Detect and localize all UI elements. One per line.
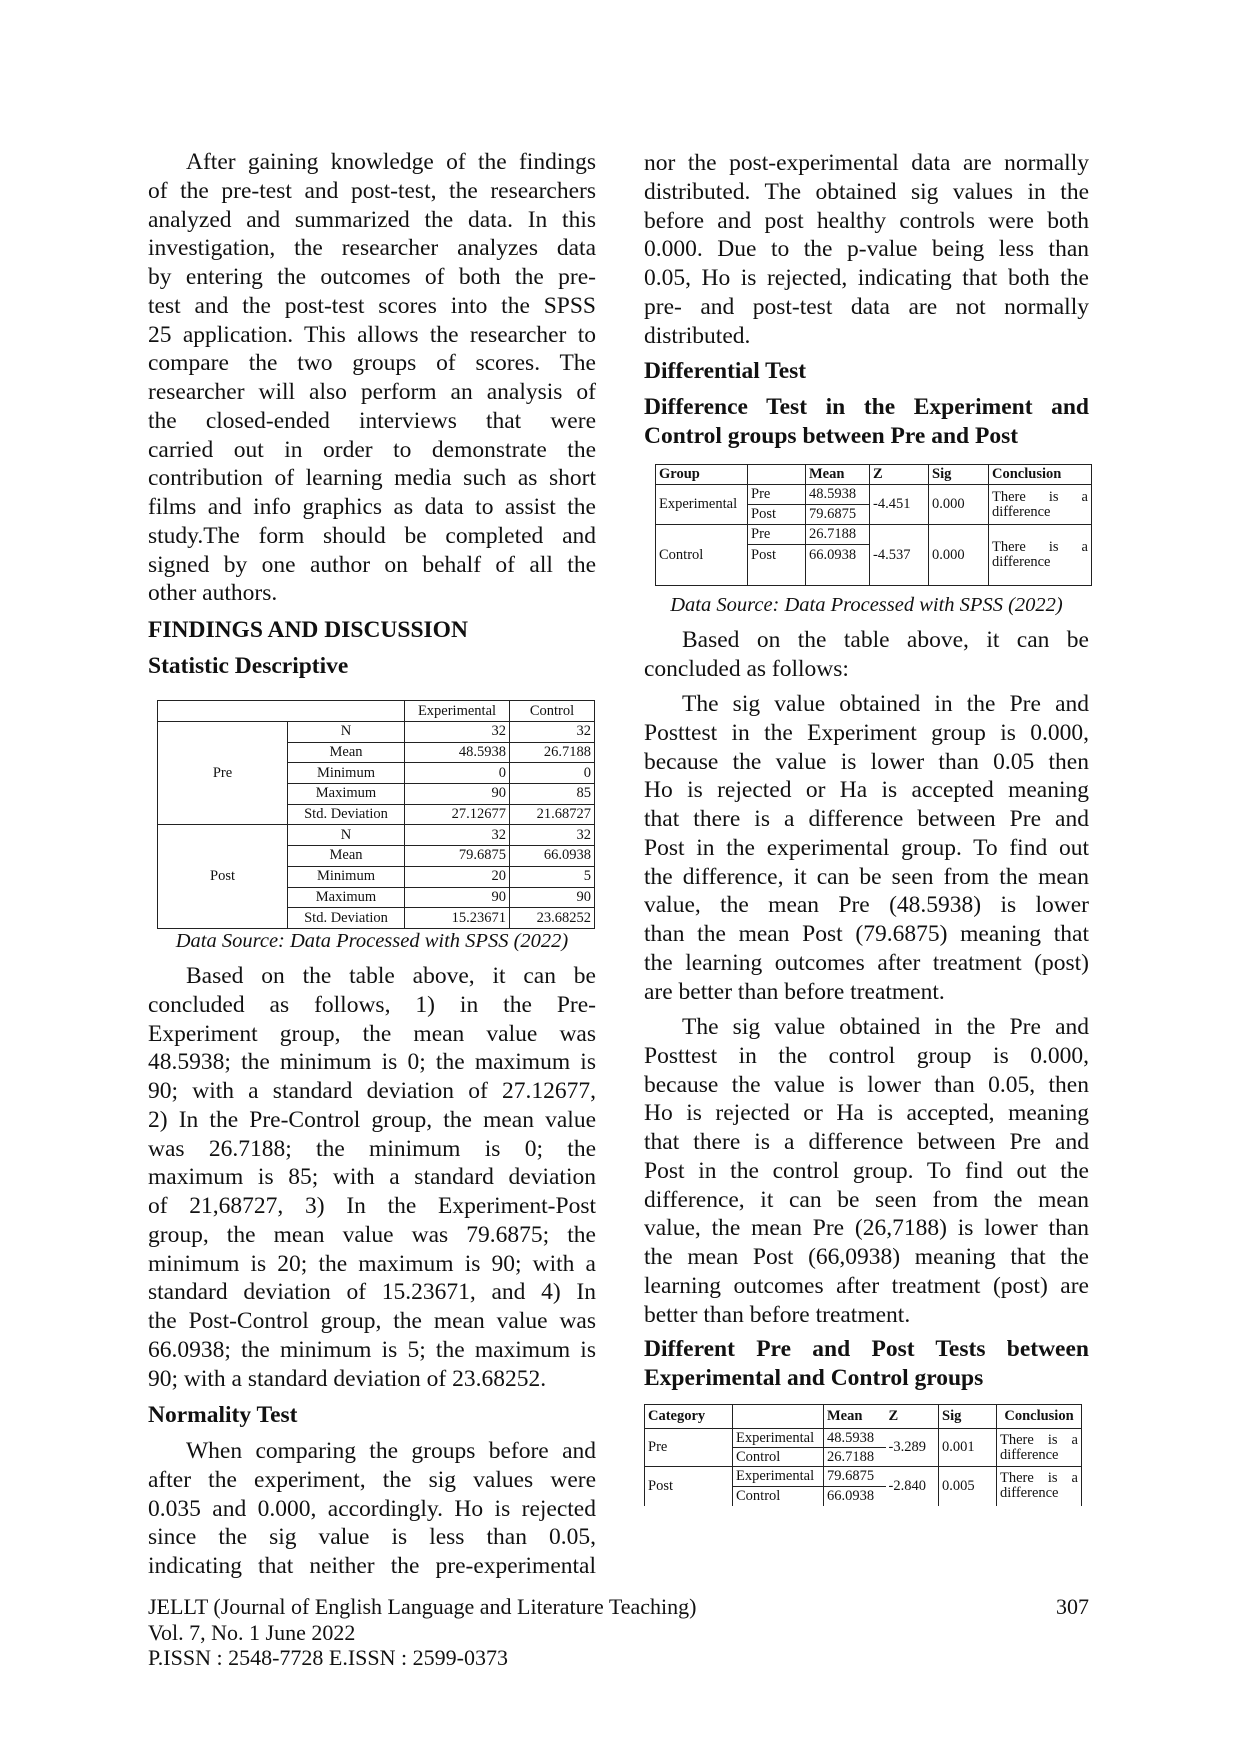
table: difference test pre/post: Pre bbox=[751, 526, 770, 542]
table: descriptive statistics: Minimum bbox=[317, 868, 375, 884]
table: descriptive statistics: 5 bbox=[584, 868, 591, 884]
left paragraph: descriptive conclusions: concluded as follows, 1) in the Pre- bbox=[148, 992, 596, 1018]
table: experimental vs control: 66.0938 bbox=[827, 1488, 874, 1504]
right paragraph: experiment group result: The sig value obtained in the Pre and bbox=[682, 691, 1089, 717]
table: descriptive statistics: Maximum bbox=[316, 889, 376, 905]
right paragraph: normality continued: nor the post-experimental data are normally bbox=[644, 150, 1089, 176]
table: difference test pre/post bbox=[655, 464, 1092, 586]
heading: normality test: Normality Test bbox=[148, 1402, 297, 1428]
table: difference test pre/post: 79.6875 bbox=[809, 506, 856, 522]
table: descriptive statistics: Std. Deviation bbox=[304, 910, 388, 926]
left paragraph: normality bbox=[148, 1438, 596, 1579]
right paragraph: based on table bbox=[644, 627, 1089, 682]
table: descriptive statistics: 32 bbox=[492, 827, 506, 843]
table: descriptive statistics: 0 bbox=[584, 765, 591, 781]
table: experimental vs control bbox=[644, 1404, 1082, 1506]
left paragraph: descriptive conclusions: 66.0938; the minimum is 5; the maximum is bbox=[148, 1337, 596, 1363]
right paragraph: control group result: Posttest in the control group is 0.000, bbox=[644, 1043, 1089, 1069]
table: difference test pre/post: Group bbox=[659, 466, 700, 482]
footer: journal info bbox=[148, 1594, 696, 1670]
right paragraph: experiment group result: Ho is rejected or Ha is accepted meaning bbox=[644, 777, 1089, 803]
right paragraph: experiment group result: value, the mean Pre (48.5938) is lower bbox=[644, 892, 1089, 918]
table: descriptive statistics: 20 bbox=[492, 868, 506, 884]
table: difference test pre/post: Experimental bbox=[659, 496, 737, 512]
right paragraph: experiment group result bbox=[644, 691, 1089, 1004]
table: experimental vs control: 79.6875 bbox=[827, 1468, 874, 1484]
left paragraph: descriptive conclusions: 48.5938; the minimum is 0; the maximum is bbox=[148, 1049, 596, 1075]
table: difference test pre/post: Mean bbox=[809, 466, 844, 482]
left paragraph: normality: 0.035 and 0.000, accordingly. Ho is rejected bbox=[148, 1496, 596, 1522]
left paragraph: descriptive conclusions: Based on the table above, it can be bbox=[186, 963, 596, 989]
left paragraph: normality: since the sig value is less than 0.05, bbox=[148, 1524, 596, 1550]
footer: page number: 307 bbox=[1056, 1594, 1089, 1619]
right paragraph: control group result: value, the mean Pre (26,7188) is lower than bbox=[644, 1215, 1089, 1241]
table: difference test pre/post: Control bbox=[659, 546, 703, 562]
table: difference test pre/post: Conclusion bbox=[992, 466, 1061, 482]
table: descriptive statistics: 90 bbox=[492, 889, 506, 905]
left paragraph: intro: test and the post-test scores into the SPSS bbox=[148, 293, 596, 319]
right paragraph: normality continued bbox=[644, 150, 1089, 348]
heading: difference test experiment and control bbox=[644, 394, 1089, 449]
right paragraph: control group result: Ho is rejected or Ha is accepted, meaning bbox=[644, 1100, 1089, 1126]
right paragraph: experiment group result: because the value is lower than 0.05 then bbox=[644, 748, 1089, 774]
table: descriptive statistics: Control bbox=[530, 702, 574, 718]
footer: journal info: Vol. 7, No. 1 June 2022 bbox=[148, 1620, 355, 1644]
table: descriptive statistics: N bbox=[341, 723, 351, 739]
table: difference test pre/post: -4.537 bbox=[873, 546, 910, 562]
left paragraph: intro: compare the two groups of scores. The bbox=[148, 350, 596, 376]
right paragraph: control group result: better than before treatment. bbox=[644, 1302, 910, 1328]
table: descriptive statistics: 32 bbox=[576, 723, 591, 739]
left paragraph: intro: signed by one author on behalf of all the bbox=[148, 552, 596, 578]
table: difference test pre/post: 26.7188 bbox=[809, 526, 856, 542]
right paragraph: control group result bbox=[644, 1014, 1089, 1328]
left paragraph: descriptive conclusions: of 21,68727, 3) In the Experiment-Post bbox=[148, 1193, 596, 1219]
right paragraph: control group result: the mean Post (66,0938) meaning that the bbox=[644, 1244, 1089, 1270]
table: experimental vs control: Post bbox=[648, 1478, 673, 1494]
caption: table 1 source: Data Source: Data Processed with SPSS (2022) bbox=[176, 930, 568, 952]
heading: statistic descriptive: Statistic Descriptive bbox=[148, 653, 348, 679]
left paragraph: normality: after the experiment, the sig values were bbox=[148, 1467, 596, 1493]
right paragraph: experiment group result: than the mean Post (79.6875) meaning that bbox=[644, 921, 1089, 947]
table: experimental vs control: 0.005 bbox=[942, 1478, 975, 1494]
right paragraph: experiment group result: Post in the experimental group. To find out bbox=[644, 835, 1089, 861]
table: experimental vs control: There is a difference bbox=[1000, 1432, 1078, 1462]
table: experimental vs control: Pre bbox=[648, 1439, 667, 1455]
table: descriptive statistics: Minimum bbox=[317, 765, 375, 781]
right paragraph: normality continued: distributed. The obtained sig values in the bbox=[644, 179, 1089, 205]
table: descriptive statistics: 48.5938 bbox=[459, 744, 506, 760]
table: descriptive statistics: 21.68727 bbox=[537, 806, 591, 822]
table: experimental vs control: -2.840 bbox=[888, 1478, 926, 1494]
left paragraph: intro: other authors. bbox=[148, 580, 277, 606]
left paragraph: intro: by entering the outcomes of both the pre- bbox=[148, 264, 596, 290]
left paragraph: descriptive conclusions: the Post-Control group, the mean value was bbox=[148, 1308, 596, 1334]
table: descriptive statistics: Pre bbox=[213, 765, 232, 781]
table: descriptive statistics: Mean bbox=[329, 847, 362, 863]
table: descriptive statistics: 90 bbox=[576, 889, 591, 905]
table: descriptive statistics: 90 bbox=[492, 785, 506, 801]
right paragraph: experiment group result: the learning outcomes after treatment (post) bbox=[644, 950, 1089, 976]
left paragraph: descriptive conclusions: was 26.7188; the minimum is 0; the bbox=[148, 1136, 596, 1162]
right paragraph: normality continued: distributed. bbox=[644, 322, 750, 348]
table: experimental vs control: 26.7188 bbox=[827, 1448, 874, 1464]
table: descriptive statistics: 32 bbox=[576, 827, 591, 843]
table: experimental vs control: Experimental bbox=[736, 1430, 814, 1446]
caption: table 2 source: Data Source: Data Processed with SPSS (2022) bbox=[670, 594, 1063, 616]
right paragraph: control group result: The sig value obtained in the Pre and bbox=[682, 1014, 1089, 1040]
left paragraph: intro: films and info graphics as data to assist the bbox=[148, 494, 596, 520]
left paragraph: intro: researcher will also perform an analysis of bbox=[148, 379, 596, 405]
right paragraph: experiment group result: are better than before treatment. bbox=[644, 978, 945, 1004]
right paragraph: control group result: that there is a difference between Pre and bbox=[644, 1129, 1089, 1155]
table: experimental vs control: Mean bbox=[827, 1408, 862, 1424]
table: descriptive statistics: 15.23671 bbox=[452, 910, 506, 926]
left paragraph: descriptive conclusions bbox=[148, 963, 596, 1392]
right paragraph: normality continued: 0.000. Due to the p-value being less than bbox=[644, 236, 1089, 262]
heading: difference test experiment and control: Control groups between Pre and Post bbox=[644, 423, 1018, 449]
right paragraph: control group result: Post in the control group. To find out the bbox=[644, 1158, 1089, 1184]
heading: different pre and post tests: Experimental and Control groups bbox=[644, 1365, 983, 1391]
right paragraph: control group result: because the value is lower than 0.05, then bbox=[644, 1072, 1089, 1098]
table: descriptive statistics: 23.68252 bbox=[537, 910, 591, 926]
table: descriptive statistics: 32 bbox=[492, 723, 506, 739]
table: descriptive statistics: N bbox=[341, 827, 351, 843]
table: experimental vs control: There is a difference bbox=[1000, 1470, 1078, 1501]
left paragraph: descriptive conclusions: standard deviation of 15.23671, and 4) In bbox=[148, 1279, 596, 1305]
heading: different pre and post tests bbox=[644, 1336, 1089, 1391]
table: difference test pre/post: There is a difference bbox=[992, 539, 1088, 570]
left paragraph: descriptive conclusions: 2) In the Pre-Control group, the mean value bbox=[148, 1107, 596, 1133]
table: difference test pre/post: Z bbox=[873, 466, 883, 482]
right paragraph: normality continued: pre- and post-test data are not normally bbox=[644, 294, 1089, 320]
table: experimental vs control: 0.001 bbox=[942, 1439, 975, 1455]
table: difference test pre/post: Sig bbox=[932, 466, 951, 482]
table: descriptive statistics: 27.12677 bbox=[452, 806, 506, 822]
right paragraph: experiment group result: Posttest in the Experiment group is 0.000, bbox=[644, 720, 1089, 746]
table: descriptive statistics: Std. Deviation bbox=[304, 806, 388, 822]
right paragraph: control group result: difference, it can be seen from the mean bbox=[644, 1186, 1089, 1212]
left paragraph: descriptive conclusions: Experiment group, the mean value was bbox=[148, 1020, 596, 1046]
right paragraph: based on table: Based on the table above, it can be bbox=[682, 627, 1089, 653]
right paragraph: experiment group result: the difference, it can be seen from the mean bbox=[644, 864, 1089, 890]
left paragraph: descriptive conclusions: 90; with a standard deviation of 27.12677, bbox=[148, 1078, 596, 1104]
table: difference test pre/post: Post bbox=[751, 506, 776, 522]
table: experimental vs control: -3.289 bbox=[888, 1439, 926, 1455]
table: descriptive statistics: Post bbox=[210, 868, 235, 884]
table: descriptive statistics: Experimental bbox=[418, 702, 496, 718]
heading: differential test: Differential Test bbox=[644, 358, 806, 384]
right paragraph: normality continued: 0.05, Ho is rejected, indicating that both the bbox=[644, 265, 1089, 291]
table: difference test pre/post: 0.000 bbox=[932, 546, 965, 562]
right paragraph: control group result: learning outcomes after treatment (post) are bbox=[644, 1273, 1089, 1299]
table: difference test pre/post: 66.0938 bbox=[809, 547, 856, 563]
table: descriptive statistics: Mean bbox=[329, 744, 362, 760]
right paragraph: based on table: concluded as follows: bbox=[644, 656, 849, 682]
table: experimental vs control: 48.5938 bbox=[827, 1430, 874, 1446]
table: descriptive statistics: 85 bbox=[576, 785, 591, 801]
table: descriptive statistics: 66.0938 bbox=[544, 847, 591, 863]
table: descriptive statistics: Maximum bbox=[316, 785, 376, 801]
left paragraph: intro: investigation, the researcher analyzes data bbox=[148, 235, 596, 261]
left paragraph: descriptive conclusions: 90; with a standard deviation of 23.68252. bbox=[148, 1366, 546, 1392]
table: difference test pre/post: -4.451 bbox=[873, 496, 910, 512]
table: descriptive statistics bbox=[157, 700, 595, 929]
table: difference test pre/post: 0.000 bbox=[932, 496, 965, 512]
left paragraph: normality: When comparing the groups before and bbox=[186, 1438, 596, 1464]
table: experimental vs control: Sig bbox=[942, 1408, 961, 1424]
left paragraph: intro: After gaining knowledge of the findings bbox=[186, 149, 596, 175]
left paragraph: intro: of the pre-test and post-test, the researchers bbox=[148, 178, 596, 204]
footer: journal info: JELLT (Journal of English Language and Literature Teaching) bbox=[148, 1594, 696, 1619]
left paragraph: normality: indicating that neither the pre-experimental bbox=[148, 1553, 596, 1579]
table: descriptive statistics: 79.6875 bbox=[459, 847, 506, 863]
left paragraph: descriptive conclusions: group, the mean value was 79.6875; the bbox=[148, 1222, 596, 1248]
table: experimental vs control: Z bbox=[888, 1408, 898, 1424]
table: experimental vs control: Category bbox=[648, 1408, 705, 1424]
heading: different pre and post tests: Different Pre and Post Tests between bbox=[644, 1336, 1089, 1362]
left paragraph: intro: study.The form should be completed and bbox=[148, 523, 596, 549]
left paragraph: intro: 25 application. This allows the researcher to bbox=[148, 322, 596, 348]
table: difference test pre/post: Post bbox=[751, 547, 776, 563]
table: difference test pre/post: 48.5938 bbox=[809, 486, 856, 502]
table: experimental vs control: Control bbox=[736, 1488, 780, 1504]
left paragraph: intro: analyzed and summarized the data. In this bbox=[148, 206, 596, 232]
right paragraph: experiment group result: that there is a difference between Pre and bbox=[644, 806, 1089, 832]
footer: journal info: P.ISSN : 2548-7728 E.ISSN : 2599-0373 bbox=[148, 1645, 508, 1670]
left paragraph: descriptive conclusions: maximum is 85; with a standard deviation bbox=[148, 1164, 596, 1190]
table: difference test pre/post: Pre bbox=[751, 486, 770, 502]
table: experimental vs control: Experimental bbox=[736, 1468, 814, 1484]
left paragraph: intro: contribution of learning media such as short bbox=[148, 465, 596, 491]
heading: difference test experiment and control: Difference Test in the Experiment and bbox=[644, 394, 1089, 420]
left paragraph: descriptive conclusions: minimum is 20; the maximum is 90; with a bbox=[148, 1250, 596, 1276]
heading: findings and discussion: FINDINGS AND DISCUSSION bbox=[148, 617, 468, 643]
table: descriptive statistics: 0 bbox=[499, 765, 506, 781]
right paragraph: normality continued: before and post healthy controls were both bbox=[644, 208, 1089, 234]
left paragraph: intro: carried out in order to demonstrate the bbox=[148, 436, 596, 462]
table: experimental vs control: Control bbox=[736, 1448, 780, 1464]
table: descriptive statistics: 26.7188 bbox=[544, 744, 591, 760]
left paragraph: intro bbox=[148, 149, 596, 606]
table: difference test pre/post: There is a difference bbox=[992, 488, 1088, 520]
table: experimental vs control: Conclusion bbox=[1004, 1408, 1074, 1424]
left paragraph: intro: the closed-ended interviews that were bbox=[148, 408, 596, 434]
